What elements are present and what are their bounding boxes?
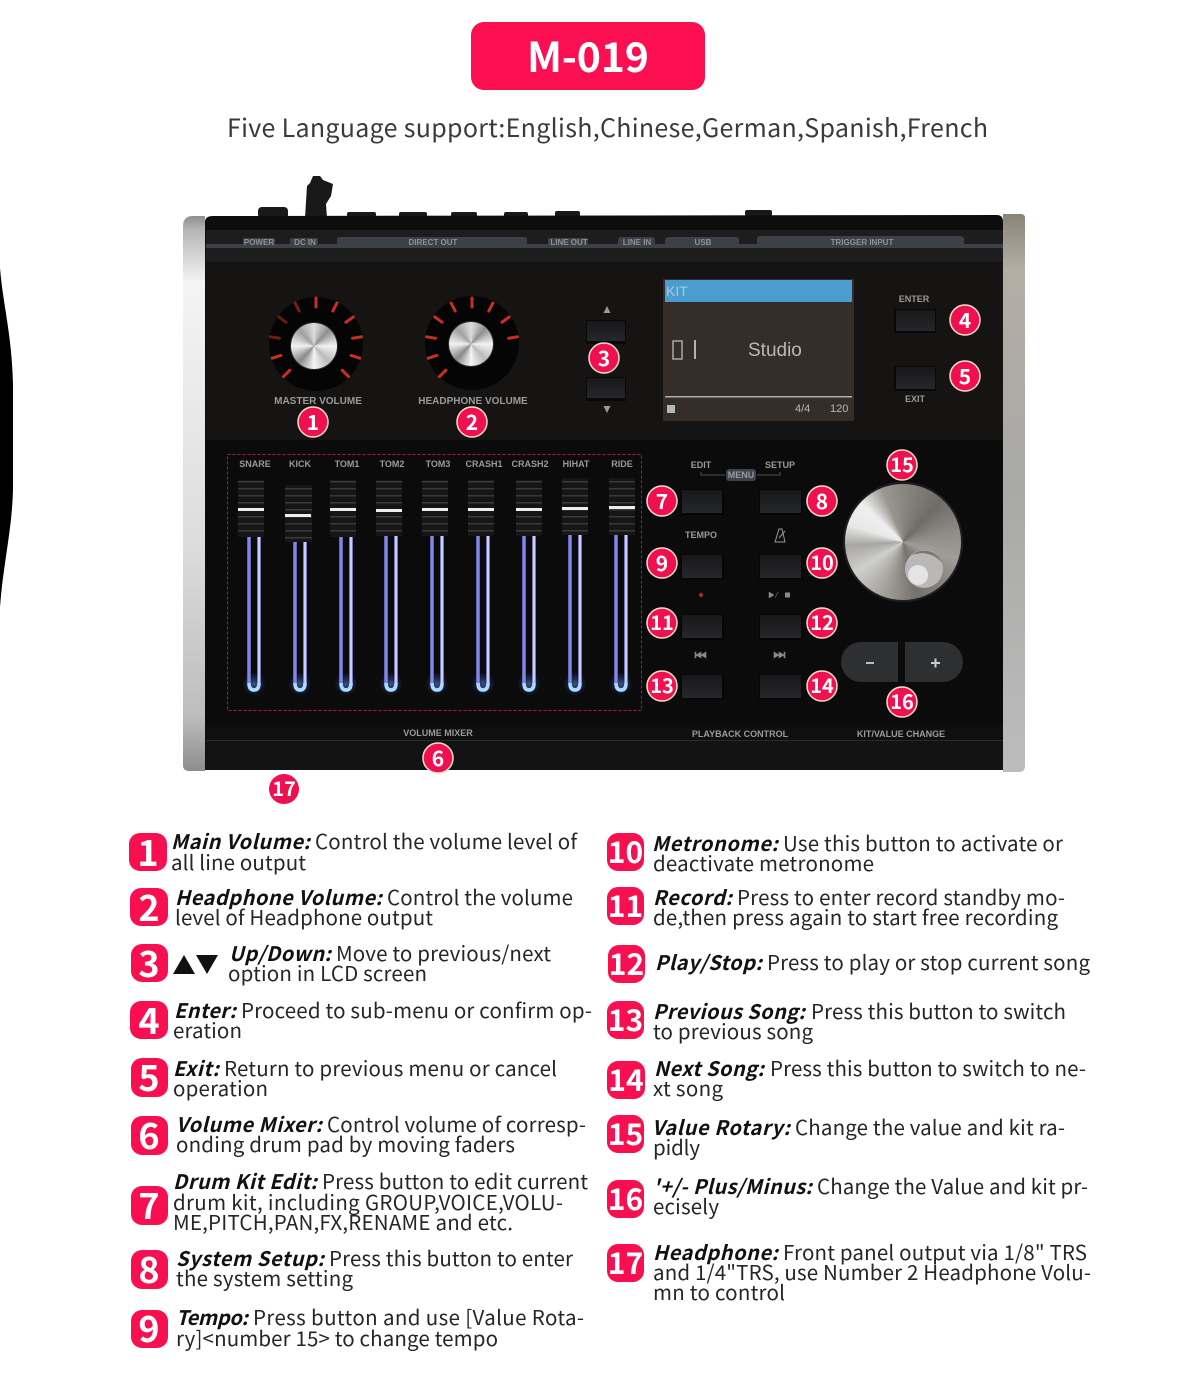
legend item 9: 9 (138, 1301, 160, 1353)
bottom label strip (206, 725, 1003, 740)
value rotary (843, 482, 963, 602)
connector label band: DC IN (294, 238, 316, 247)
volume mixer dashed frame (228, 454, 642, 710)
control labels: SETUP (765, 460, 795, 470)
legend item 1 (129, 825, 578, 877)
legend item 13 (607, 995, 1066, 1045)
legend item 12: 12 (609, 940, 644, 984)
fader channel labels: CRASH1 (465, 459, 503, 469)
legend item 8 (131, 1242, 573, 1294)
legend item 2: level of Headphone output (175, 901, 433, 931)
strip labels (403, 728, 945, 739)
legend item 15: Value Rotary: (652, 1112, 792, 1141)
LCD screen: 120 (830, 403, 848, 415)
legend item 4: 4 (138, 993, 160, 1045)
legend item 17: and 1/4"TRS, use Number 2 Headphone Volu- (653, 1256, 1091, 1286)
number marker digits: 15 (890, 449, 914, 478)
legend item 2: Control the volume (387, 881, 573, 911)
legend item 8: the system setting (176, 1262, 353, 1292)
legend item 17: Front panel output via 1/8" TRS (783, 1236, 1087, 1266)
legend item 3: Move to previous/next (336, 937, 551, 967)
legend item 13: 13 (608, 996, 643, 1040)
legend item 14: Press this button to switch to ne- (770, 1052, 1086, 1082)
legend item 10: Metronome: (652, 828, 780, 857)
legend item 3: option in LCD screen (228, 957, 427, 987)
legend item 5: Return to previous menu or cancel (224, 1052, 557, 1082)
headphone volume knob (425, 296, 519, 390)
number marker digits: 17 (272, 773, 296, 802)
legend item 1: 1 (137, 825, 159, 877)
connector label band: POWER (244, 238, 274, 247)
legend item 14 (607, 1052, 1086, 1102)
legend item 3: Up/Down: (229, 938, 332, 967)
number marker digits: 14 (810, 670, 834, 699)
legend item 6: Volume Mixer: (176, 1109, 324, 1138)
fader caps (238, 478, 635, 542)
legend item 9: Press button and use [Value Rota- (253, 1301, 584, 1331)
number marker digits: 10 (810, 547, 834, 576)
legend item 16: ecisely (653, 1190, 719, 1220)
fader channel labels: HIHAT (563, 459, 590, 469)
legend item 2 (130, 880, 573, 932)
up down buttons (586, 306, 626, 413)
fader channel labels: TOM1 (335, 459, 359, 469)
title badge: M-019 (527, 24, 649, 84)
legend item 12 (608, 940, 1090, 984)
connector label band: USB (695, 238, 712, 247)
legend item 15: Change the value and kit ra- (795, 1111, 1065, 1141)
LCD screen: 4/4 (795, 403, 810, 415)
legend item 6 (131, 1108, 586, 1160)
legend item 6: onding drum pad by moving faders (176, 1128, 515, 1158)
legend item 10: Use this button to activate or (783, 827, 1063, 857)
number marker digits: 9 (656, 548, 668, 578)
control labels: EDIT (691, 460, 712, 470)
upper panel (206, 262, 1003, 440)
legend item 11: de,then press again to start free recording (653, 901, 1058, 931)
top ports (258, 176, 772, 219)
knob labels: MASTER VOLUME (274, 396, 362, 407)
legend item 14: 14 (608, 1056, 644, 1100)
legend item 3: 3 (138, 936, 160, 988)
legend item 16: '+/- Plus/Minus: (653, 1171, 814, 1200)
connector label band: DIRECT OUT (409, 238, 458, 247)
legend item 6: 6 (138, 1108, 160, 1160)
strip labels: KIT/VALUE CHANGE (857, 729, 945, 739)
legend item 17: 17 (608, 1239, 643, 1283)
fader tube glow (242, 672, 633, 696)
legend item 3 (131, 936, 551, 988)
legend item 4: Proceed to sub-menu or confirm op- (241, 994, 592, 1024)
connector label band: TRIGGER INPUT (831, 238, 893, 247)
legend item 11 (607, 881, 1065, 931)
LCD screen (663, 279, 854, 421)
legend item 15: pidly (653, 1131, 700, 1161)
legend item 13: to previous song (653, 1015, 813, 1045)
legend item 17: Headphone: (653, 1237, 780, 1266)
number marker digits (272, 305, 971, 802)
number marker digits: 4 (959, 305, 971, 335)
control labels: MENU (728, 470, 754, 480)
fader channel labels: RIDE (611, 459, 633, 469)
legend item 16: 16 (608, 1175, 643, 1219)
strip labels: VOLUME MIXER (403, 728, 473, 738)
legend item 17 (607, 1236, 1091, 1306)
connector label band: LINE OUT (550, 238, 588, 247)
legend item 13: Press this button to switch (811, 995, 1066, 1025)
legend item 7: Drum Kit Edit: (173, 1166, 318, 1195)
control labels: TEMPO (685, 530, 717, 540)
title badge (471, 22, 705, 90)
legend item 4: Enter: (174, 995, 238, 1024)
legend item 14: Next Song: (654, 1053, 766, 1082)
enter and exit buttons: EXIT (905, 394, 925, 404)
legend item 5: 5 (138, 1050, 160, 1102)
legend item 2: 2 (138, 880, 160, 932)
device photo (183, 176, 1025, 804)
legend item 1: Main Volume: (171, 826, 312, 855)
legend item 17: mn to control (653, 1276, 785, 1306)
subtitle: Five Language support:English,Chinese,German,Spanish,French (227, 109, 988, 145)
left metal side (183, 216, 205, 771)
body (205, 215, 1003, 770)
master volume knob (269, 297, 363, 391)
legend item 7 (131, 1165, 588, 1236)
fader white markers (238, 506, 635, 517)
fader channel labels: TOM3 (426, 459, 450, 469)
legend item 4 (130, 993, 592, 1045)
legend item 5: Exit: (173, 1053, 220, 1082)
enter and exit buttons: ENTER (899, 294, 930, 304)
legend item 16: Change the Value and kit pr- (817, 1170, 1088, 1200)
decorative black shape at left edge (0, 268, 13, 607)
number marker digits: 8 (816, 486, 828, 516)
number marker digits: 2 (466, 407, 478, 437)
number marker digits: 7 (656, 486, 668, 516)
number marker digits: 1 (307, 407, 319, 437)
legend item 12: Play/Stop: (655, 947, 764, 976)
legend item 15 (607, 1110, 1065, 1161)
LCD screen: Studio (748, 340, 802, 361)
legend item 5 (131, 1050, 557, 1102)
legend item 11: Press to enter record standby mo- (737, 881, 1065, 911)
fader channel labels: CRASH2 (511, 459, 549, 469)
legend item 8: 8 (138, 1242, 160, 1294)
legend item 9 (131, 1301, 584, 1353)
fader channel labels: KICK (289, 459, 311, 469)
connector label band (206, 230, 1003, 262)
legend item 11: Record: (653, 882, 734, 911)
legend item 5: operation (173, 1072, 268, 1102)
legend item 10: deactivate metronome (653, 847, 874, 877)
control labels (685, 460, 795, 658)
legend item 6: Control volume of corresp- (327, 1108, 586, 1138)
legend item 8: System Setup: (176, 1243, 326, 1272)
number marker digits: 13 (650, 670, 674, 699)
number marker digits: 16 (890, 686, 914, 715)
legend item 7: ME,PITCH,PAN,FX,RENAME and etc. (173, 1206, 513, 1236)
legend item 16 (607, 1170, 1088, 1220)
playback buttons (681, 489, 802, 700)
legend item 13: Previous Song: (653, 996, 806, 1025)
number marker digits: 6 (432, 743, 444, 773)
legend item 7: Press button to edit current (322, 1165, 588, 1195)
legend item 1: all line output (171, 846, 306, 876)
lower panel (206, 441, 1003, 725)
fader channel labels (239, 459, 633, 469)
number marker digits: 11 (650, 607, 674, 636)
connector label band: LINE IN (623, 238, 651, 247)
plus minus buttons (841, 642, 963, 682)
legend item 1: Control the volume level of (315, 825, 578, 855)
fader channel labels: SNARE (239, 459, 271, 469)
legend item 15: 15 (608, 1110, 643, 1154)
legend item 4: eration (173, 1014, 242, 1044)
legend item 2: Headphone Volume: (175, 882, 384, 911)
LCD screen: KIT (666, 283, 688, 299)
number marker digits: 12 (810, 607, 834, 636)
number marker digits: 3 (598, 343, 610, 373)
knob labels: HEADPHONE VOLUME (418, 396, 528, 407)
legend item 10: 10 (608, 828, 643, 872)
legend item 7: drum kit, including GROUP,VOICE,VOLU- (173, 1186, 563, 1216)
legend item 11: 11 (608, 882, 643, 926)
legend item 12: Press to play or stop current song (767, 946, 1090, 976)
legend item 9: Tempo: (176, 1302, 250, 1331)
enter and exit buttons (894, 294, 936, 404)
strip labels: PLAYBACK CONTROL (692, 729, 789, 739)
number marker digits: 5 (959, 361, 971, 391)
fader channel labels: TOM2 (380, 459, 404, 469)
knob labels (274, 396, 528, 407)
legend item 8: Press this button to enter (329, 1242, 573, 1272)
legend item 14: xt song (653, 1072, 723, 1102)
legend item 7: 7 (138, 1178, 160, 1230)
number markers on device (269, 305, 980, 804)
legend item 9: ry]<number 15> to change tempo (176, 1322, 498, 1352)
right metal side (1003, 214, 1025, 772)
fader tubes (249, 535, 626, 690)
legend item 10 (607, 827, 1063, 877)
